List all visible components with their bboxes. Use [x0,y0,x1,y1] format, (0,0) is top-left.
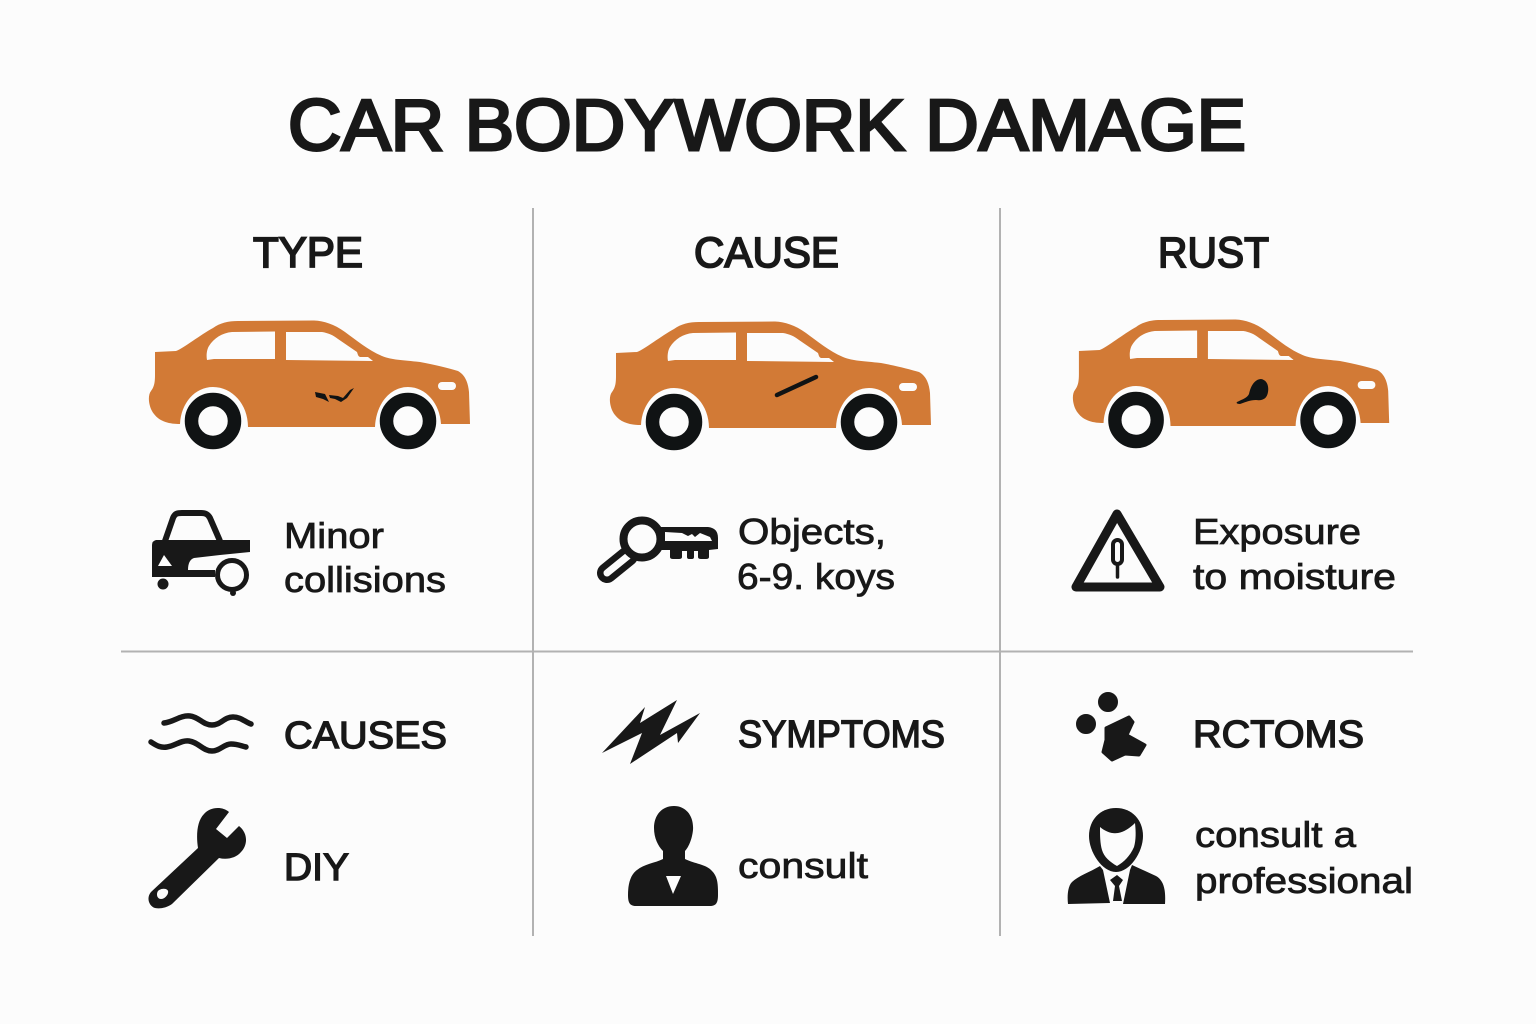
text: symptoms: SYMPTOMS [738,714,945,756]
icon: small car with magnifier [152,513,250,596]
text: exposure to moisture [1193,511,1396,597]
heading: cause: CAUSE [694,229,839,277]
icon: waves [151,716,251,751]
icon: person silhouette [628,806,718,906]
text: consult a professional [1195,814,1413,901]
panel: causes and diy [148,715,447,908]
text: minor collisions: Minor [284,515,384,556]
icon: person with tie [1068,808,1165,904]
icon: lightning bolt [602,700,700,764]
text: consult a professional: professional [1195,860,1413,901]
text: objects, keys: Objects, [738,511,886,552]
icon: wrench [148,808,246,908]
icon: key [607,520,718,573]
title: CAR BODYWORK DAMAGE [288,86,1246,166]
text: minor collisions: collisions [284,559,446,600]
heading: rust: RUST [1158,229,1269,277]
heading: type: TYPE [253,229,363,277]
icon: warning triangle [1076,514,1160,587]
text: exposure to moisture: to moisture [1193,556,1396,597]
icon: orange car with scratch [610,322,931,444]
panel: symptoms and consult [602,700,945,906]
icon: rust blobs [1078,694,1145,760]
text: diy: DIY [284,847,349,889]
text: exposure to moisture: Exposure [1193,511,1361,552]
text: causes: CAUSES [284,715,447,757]
panel: rust [1073,229,1396,597]
text: objects, keys [737,511,895,597]
text: objects, keys: 6-9. koys [737,556,895,597]
text: consult: consult [738,845,868,886]
icon: orange car with dent [149,320,470,442]
text: rctoms: RCTOMS [1193,714,1364,756]
panel: cause [607,229,931,597]
text: minor collisions [284,515,446,600]
icon: orange car with rust spot [1073,320,1389,442]
panel: rctoms and consult a professional [1068,694,1413,904]
text: consult a professional: consult a [1195,814,1357,855]
panel: type [149,229,470,600]
